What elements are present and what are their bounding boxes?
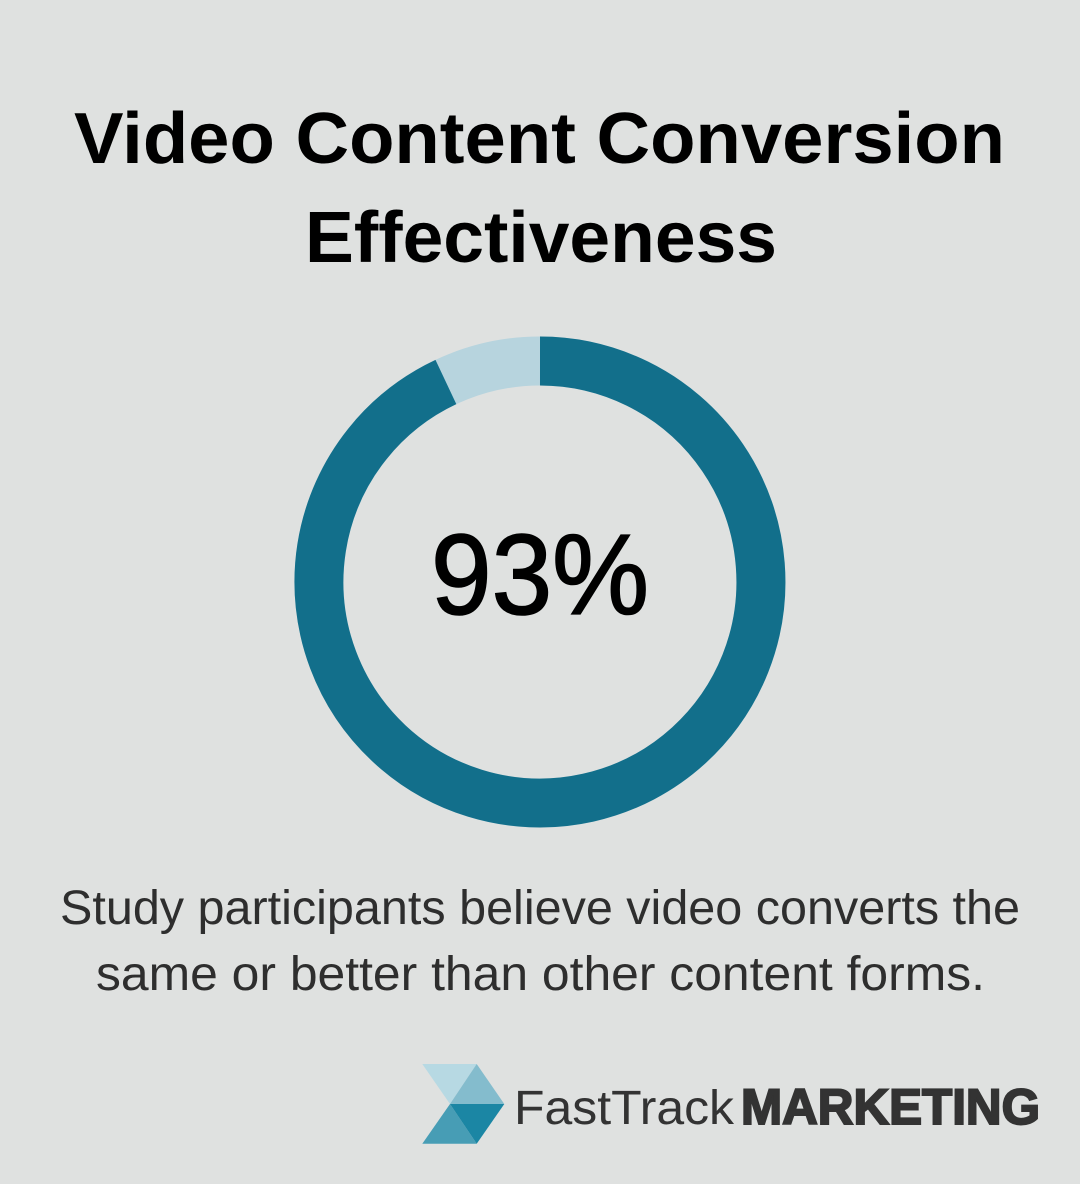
logo wordmark	[514, 1079, 1040, 1135]
description text	[60, 882, 1020, 1001]
donut track: remaining 7%	[319, 361, 761, 803]
title: Effectiveness	[305, 198, 777, 278]
logo icon	[422, 1064, 504, 1144]
donut chart: 93%	[319, 361, 761, 803]
center value: 93%	[431, 512, 649, 639]
donut value arc: 93%	[319, 361, 761, 803]
logo wordmark: FastTrack	[514, 1082, 735, 1135]
description text: same or better than other content forms.	[96, 948, 985, 1001]
description text: Study participants believe video converts the	[60, 882, 1020, 935]
title: Video Content Conversion	[74, 99, 1005, 179]
logo wordmark: MARKETING	[741, 1079, 1040, 1135]
logo: FastTrack Marketing	[422, 1064, 1040, 1144]
title	[74, 99, 1005, 278]
